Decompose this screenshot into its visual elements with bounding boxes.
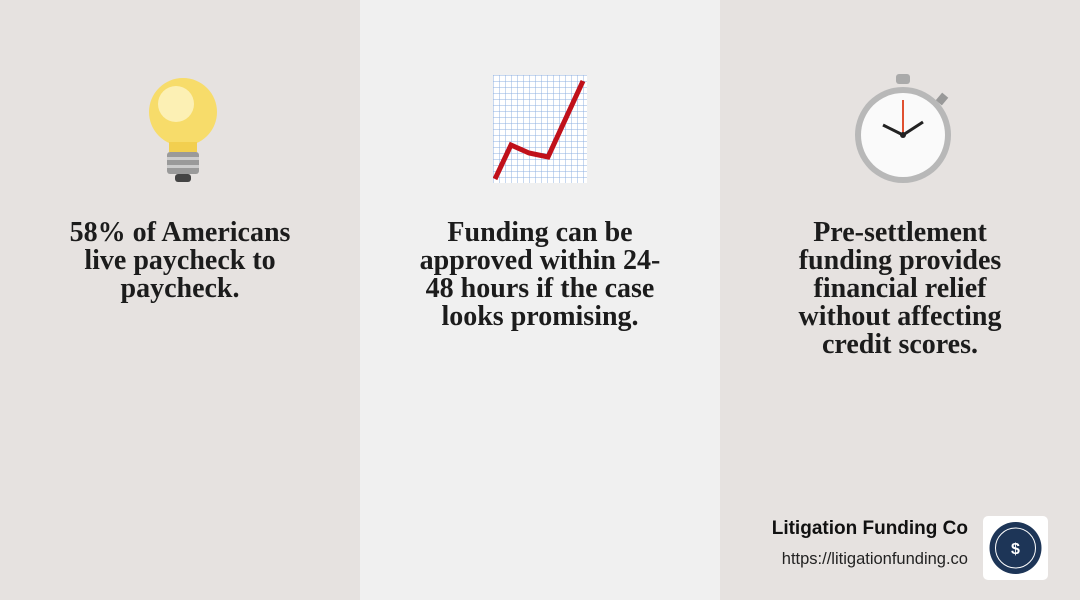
panel: middle <box>360 0 720 600</box>
panel: left <box>0 0 360 600</box>
text: stat 2: Funding can be approved within 24-48 hours if the case looks promising. <box>420 217 660 332</box>
logo: $ <box>1011 541 1020 558</box>
panel: right <box>720 0 1080 600</box>
text: stat 1: 58% of Americans live paycheck to paycheck. <box>70 217 290 304</box>
brand footer <box>772 516 1048 580</box>
url: https://litigationfunding.co <box>782 550 968 568</box>
logo <box>983 516 1048 580</box>
icon: stopwatch <box>855 74 951 183</box>
text: stat 3: Pre-settlement funding provides financial relief without affecting credit scores. <box>798 217 1001 360</box>
icon: chart <box>493 75 587 183</box>
icon: lightbulb <box>149 78 217 182</box>
brand name: Litigation Funding Co <box>772 518 968 539</box>
